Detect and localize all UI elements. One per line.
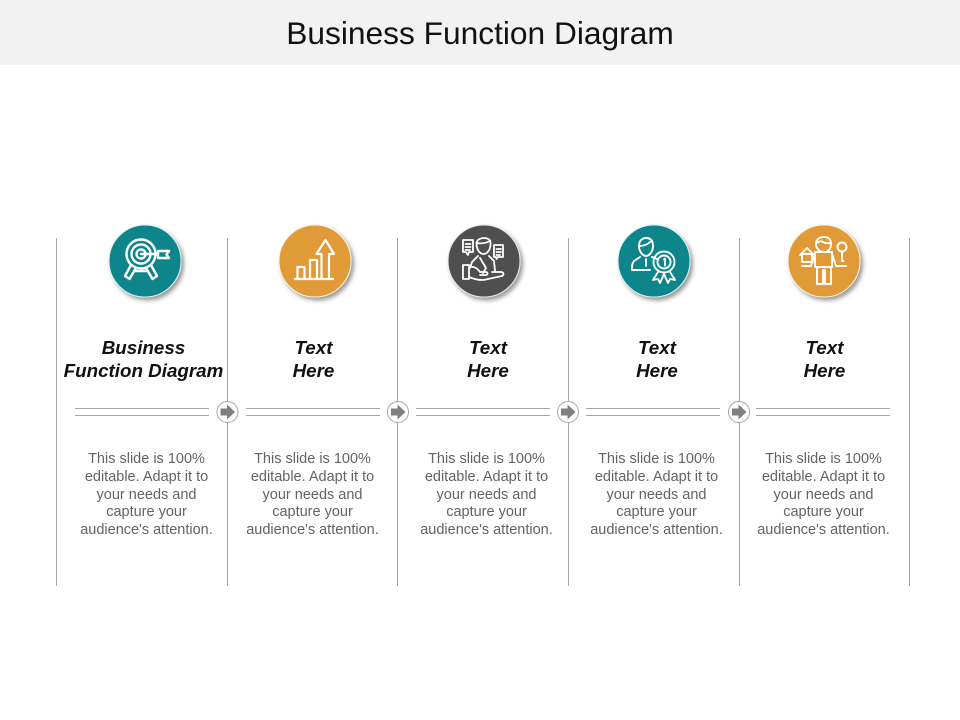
heading 2: Here bbox=[293, 360, 334, 381]
text block 2: audience's attention. bbox=[246, 522, 379, 538]
text block 5: your needs and bbox=[774, 486, 873, 502]
icon: person holding house and key bbox=[788, 225, 860, 297]
icon: growth chart bbox=[279, 225, 351, 297]
heading 1 bbox=[64, 337, 223, 381]
icon: person with award ribbon bbox=[618, 225, 690, 297]
text block 5 bbox=[757, 451, 890, 538]
text block 3: your needs and bbox=[437, 486, 536, 502]
text block 1: your needs and bbox=[97, 486, 196, 502]
heading 3 bbox=[467, 337, 509, 381]
text block 4: capture your bbox=[616, 504, 697, 520]
text block 2 bbox=[246, 451, 379, 538]
text block 2: editable. Adapt it to bbox=[251, 469, 374, 485]
text block 1: capture your bbox=[106, 504, 187, 520]
text block 4: This slide is 100% bbox=[598, 451, 715, 467]
text block 2: This slide is 100% bbox=[254, 451, 371, 467]
text block 3: editable. Adapt it to bbox=[425, 469, 548, 485]
heading 1: Business bbox=[102, 337, 185, 358]
text block 5: capture your bbox=[783, 504, 864, 520]
icon: person with chat bubbles and hand bbox=[448, 225, 520, 297]
text block 4: editable. Adapt it to bbox=[595, 469, 718, 485]
heading 3: Text bbox=[469, 337, 507, 358]
text block 1: editable. Adapt it to bbox=[85, 469, 208, 485]
text block 1 bbox=[80, 451, 213, 538]
text block 1: This slide is 100% bbox=[88, 451, 205, 467]
text block 2: your needs and bbox=[263, 486, 362, 502]
text block 3 bbox=[420, 451, 553, 538]
heading 5 bbox=[804, 337, 845, 381]
header band bbox=[0, 0, 960, 65]
title: Business Function Diagram bbox=[286, 15, 674, 51]
icon: target bbox=[109, 225, 181, 297]
text block 1: audience's attention. bbox=[80, 522, 213, 538]
text block 4: your needs and bbox=[607, 486, 706, 502]
heading 5: Text bbox=[806, 337, 843, 358]
text block 3: This slide is 100% bbox=[428, 451, 545, 467]
text block 3: capture your bbox=[446, 504, 527, 520]
heading 2: Text bbox=[295, 337, 332, 358]
text block 4: audience's attention. bbox=[590, 522, 723, 538]
text block 3: audience's attention. bbox=[420, 522, 553, 538]
heading 3: Here bbox=[467, 360, 509, 381]
heading 1: Function Diagram bbox=[64, 360, 223, 381]
text block 2: capture your bbox=[272, 504, 353, 520]
heading 5: Here bbox=[804, 360, 845, 381]
text block 5: audience's attention. bbox=[757, 522, 890, 538]
heading 4 bbox=[636, 337, 678, 381]
text block 5: This slide is 100% bbox=[765, 451, 882, 467]
heading 4: Here bbox=[636, 360, 678, 381]
heading 4: Text bbox=[638, 337, 676, 358]
text block 5: editable. Adapt it to bbox=[762, 469, 885, 485]
heading 2 bbox=[293, 337, 334, 381]
text block 4 bbox=[590, 451, 723, 538]
arrow connectors bbox=[217, 402, 750, 422]
